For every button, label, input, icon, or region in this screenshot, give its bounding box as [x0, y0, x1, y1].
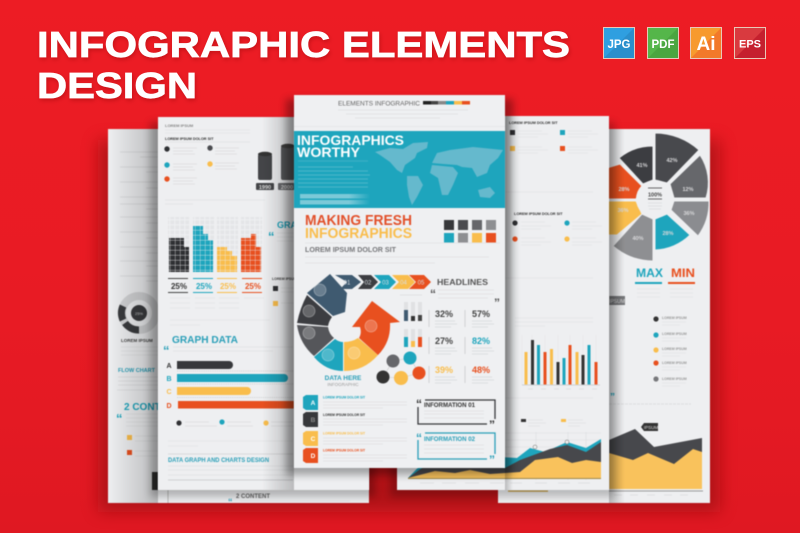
heading: making fresh: INFOGRAPHICS — [305, 226, 412, 242]
data here label: INFOGRAPHIC — [327, 382, 359, 387]
info box 2: “ — [416, 431, 422, 445]
quote mark: “ — [430, 287, 436, 301]
heading: content: 2 CONTENT — [236, 494, 270, 500]
colour swatches — [444, 220, 496, 243]
lettered list: LOREM IPSUM DOLOR SIT — [323, 413, 365, 417]
icon: JPG — [604, 28, 634, 58]
format icons — [604, 28, 766, 58]
side legend: LOREM IPSUM — [272, 277, 297, 281]
quote mark: ” — [610, 392, 615, 403]
info box 2 — [416, 431, 497, 467]
chevron arrows: 05 — [418, 280, 425, 286]
info box 2: ” — [489, 453, 495, 467]
shadow — [286, 99, 513, 475]
pie labels — [617, 158, 695, 242]
quote mark: ” — [494, 296, 500, 310]
heading: max — [635, 268, 663, 297]
heading: min — [668, 268, 695, 297]
lettered list: B — [311, 417, 316, 424]
chart legend — [521, 419, 586, 426]
cylinders: 2000 — [281, 185, 293, 191]
heading: min: MIN — [671, 268, 695, 280]
banner: WORTHY — [297, 144, 361, 160]
quote mark: “ — [228, 497, 232, 507]
pie labels: 41% — [636, 163, 648, 169]
lettered list — [303, 395, 407, 463]
mini bar charts — [400, 295, 422, 347]
legend dots — [176, 419, 294, 426]
pie centre: 100% — [648, 192, 662, 198]
pie labels: 42% — [666, 158, 678, 164]
stats grid: 48% — [472, 365, 490, 375]
page heading — [294, 100, 505, 126]
title — [37, 24, 570, 106]
text intro: LOREM IPSUM — [165, 123, 194, 128]
shadow — [390, 122, 615, 497]
data here label: DATA HERE — [325, 375, 362, 382]
legend dots — [512, 212, 602, 245]
heading: graph data: GRAPH DATA — [172, 334, 238, 346]
world map — [375, 142, 503, 205]
panel: left page — [158, 117, 369, 490]
chevron arrows: 01 — [344, 280, 351, 286]
percent labels: 25% — [245, 282, 261, 291]
tag: IPSUM — [609, 299, 625, 305]
data here label — [325, 375, 362, 387]
stats grid: 39% — [435, 365, 453, 375]
horizontal bar chart: D — [166, 403, 172, 410]
chevron arrows: 02 — [365, 280, 372, 286]
icon: EPS — [734, 28, 766, 58]
pie labels: 28% — [662, 231, 674, 237]
horizontal bar chart: A — [166, 363, 172, 370]
text intro — [165, 123, 250, 142]
lettered list: D — [311, 453, 316, 460]
legend: LOREM IPSUM — [662, 332, 687, 336]
legend squares — [509, 121, 598, 153]
pie labels: 12% — [682, 187, 694, 193]
button — [152, 472, 158, 490]
stats grid: 82% — [472, 336, 490, 346]
horizontal bar chart: C — [166, 389, 172, 396]
label: LOREM IPSUM — [121, 338, 153, 343]
heading: making fresh: MAKING FRESH — [305, 213, 412, 229]
horizontal bar chart: B — [166, 376, 172, 383]
panel: centre page — [294, 95, 505, 468]
stats grid: 27% — [435, 336, 453, 346]
icon: Ai — [690, 28, 722, 58]
legend squares: LOREM IPSUM DOLOR SIT — [509, 121, 558, 125]
info box 1: “ — [416, 397, 422, 411]
legend: LOREM IPSUM — [662, 377, 687, 381]
bar chart — [522, 335, 600, 389]
heading: graph: GRA — [277, 220, 298, 230]
icon: JPG: JPG — [607, 39, 631, 51]
info box 1 — [416, 397, 497, 432]
info box 1: INFORMATION 01 — [424, 403, 476, 409]
circle network — [376, 352, 426, 385]
icon: EPS: EPS — [739, 38, 761, 50]
area chart — [609, 429, 703, 495]
legend dots — [164, 145, 239, 184]
tag — [641, 423, 658, 431]
legend — [653, 316, 687, 386]
pie chart — [600, 133, 709, 261]
lettered list: A — [311, 400, 316, 407]
quote mark: “ — [268, 229, 274, 244]
stats grid: 57% — [472, 309, 490, 319]
quote mark: “ — [163, 343, 170, 358]
chevron arrows — [335, 275, 431, 289]
icon: Ai: Ai — [696, 34, 716, 55]
pie labels: 36% — [683, 211, 695, 217]
legend: LOREM IPSUM — [662, 361, 687, 365]
lettered list: LOREM IPSUM DOLOR SIT — [323, 448, 365, 452]
icon: PDF — [648, 28, 678, 58]
panel: back left page — [108, 129, 369, 507]
panel: back right page — [498, 129, 710, 503]
heading: making fresh — [305, 213, 412, 242]
title: INFOGRAPHIC ELEMENTS — [37, 24, 570, 65]
stats grid — [429, 309, 494, 383]
subheading: LOREM IPSUM DOLOR SIT — [305, 245, 396, 254]
area chart — [408, 432, 601, 483]
legend: LOREM IPSUM — [662, 316, 687, 320]
percent labels: 25% — [220, 282, 236, 291]
cylinders: 1990 — [259, 185, 271, 191]
info box 2: INFORMATION 02 — [424, 437, 476, 443]
lettered list: C — [311, 436, 316, 443]
stats grid: 32% — [435, 309, 453, 319]
pie centre — [636, 180, 674, 218]
heading: headlines: HEADLINES — [437, 277, 488, 287]
legend squares — [127, 435, 158, 456]
heading: flow chart: FLOW CHART — [118, 368, 156, 374]
waffle bar chart — [168, 217, 263, 272]
chevron arrows: 04 — [400, 280, 407, 286]
info box 1: ” — [489, 418, 495, 432]
legend dots: LOREM IPSUM DOLOR SIT — [514, 212, 563, 216]
heading: data graph: DATA GRAPH AND CHARTS DESIGN — [168, 458, 269, 464]
text intro: LOREM IPSUM DOLOR SIT — [165, 137, 214, 141]
lettered list: LOREM IPSUM DOLOR SIT — [323, 432, 365, 436]
title: DESIGN — [37, 65, 197, 106]
panel: right page — [397, 116, 609, 490]
heading: max: MAX — [636, 268, 663, 280]
pie labels: 40% — [632, 236, 644, 242]
chevron arrows: 03 — [382, 280, 389, 286]
icon: PDF: PDF — [652, 39, 674, 51]
banner — [294, 131, 505, 208]
side legend — [272, 277, 297, 306]
percent labels: 25% — [196, 282, 212, 291]
horizontal bar chart — [166, 361, 294, 410]
heading: 2 content: 2 CONT — [124, 402, 161, 413]
pie labels: 28% — [618, 187, 630, 193]
donut chart — [121, 296, 156, 330]
page heading: ELEMENTS INFOGRAPHIC — [338, 100, 420, 108]
tag: IPSUM — [644, 425, 658, 430]
shadow — [150, 122, 375, 497]
banner: INFOGRAPHICS — [297, 132, 404, 148]
cylinders — [256, 144, 296, 191]
percent labels — [168, 278, 262, 292]
donut chart: 25% — [135, 311, 143, 316]
pie labels: 36% — [617, 208, 629, 214]
spiral arrow diagram — [297, 274, 400, 371]
tag — [609, 296, 625, 305]
lettered list: LOREM IPSUM DOLOR SIT — [323, 396, 365, 400]
legend: LOREM IPSUM — [662, 347, 687, 351]
percent labels: 25% — [171, 282, 187, 291]
quote mark: “ — [116, 411, 122, 426]
